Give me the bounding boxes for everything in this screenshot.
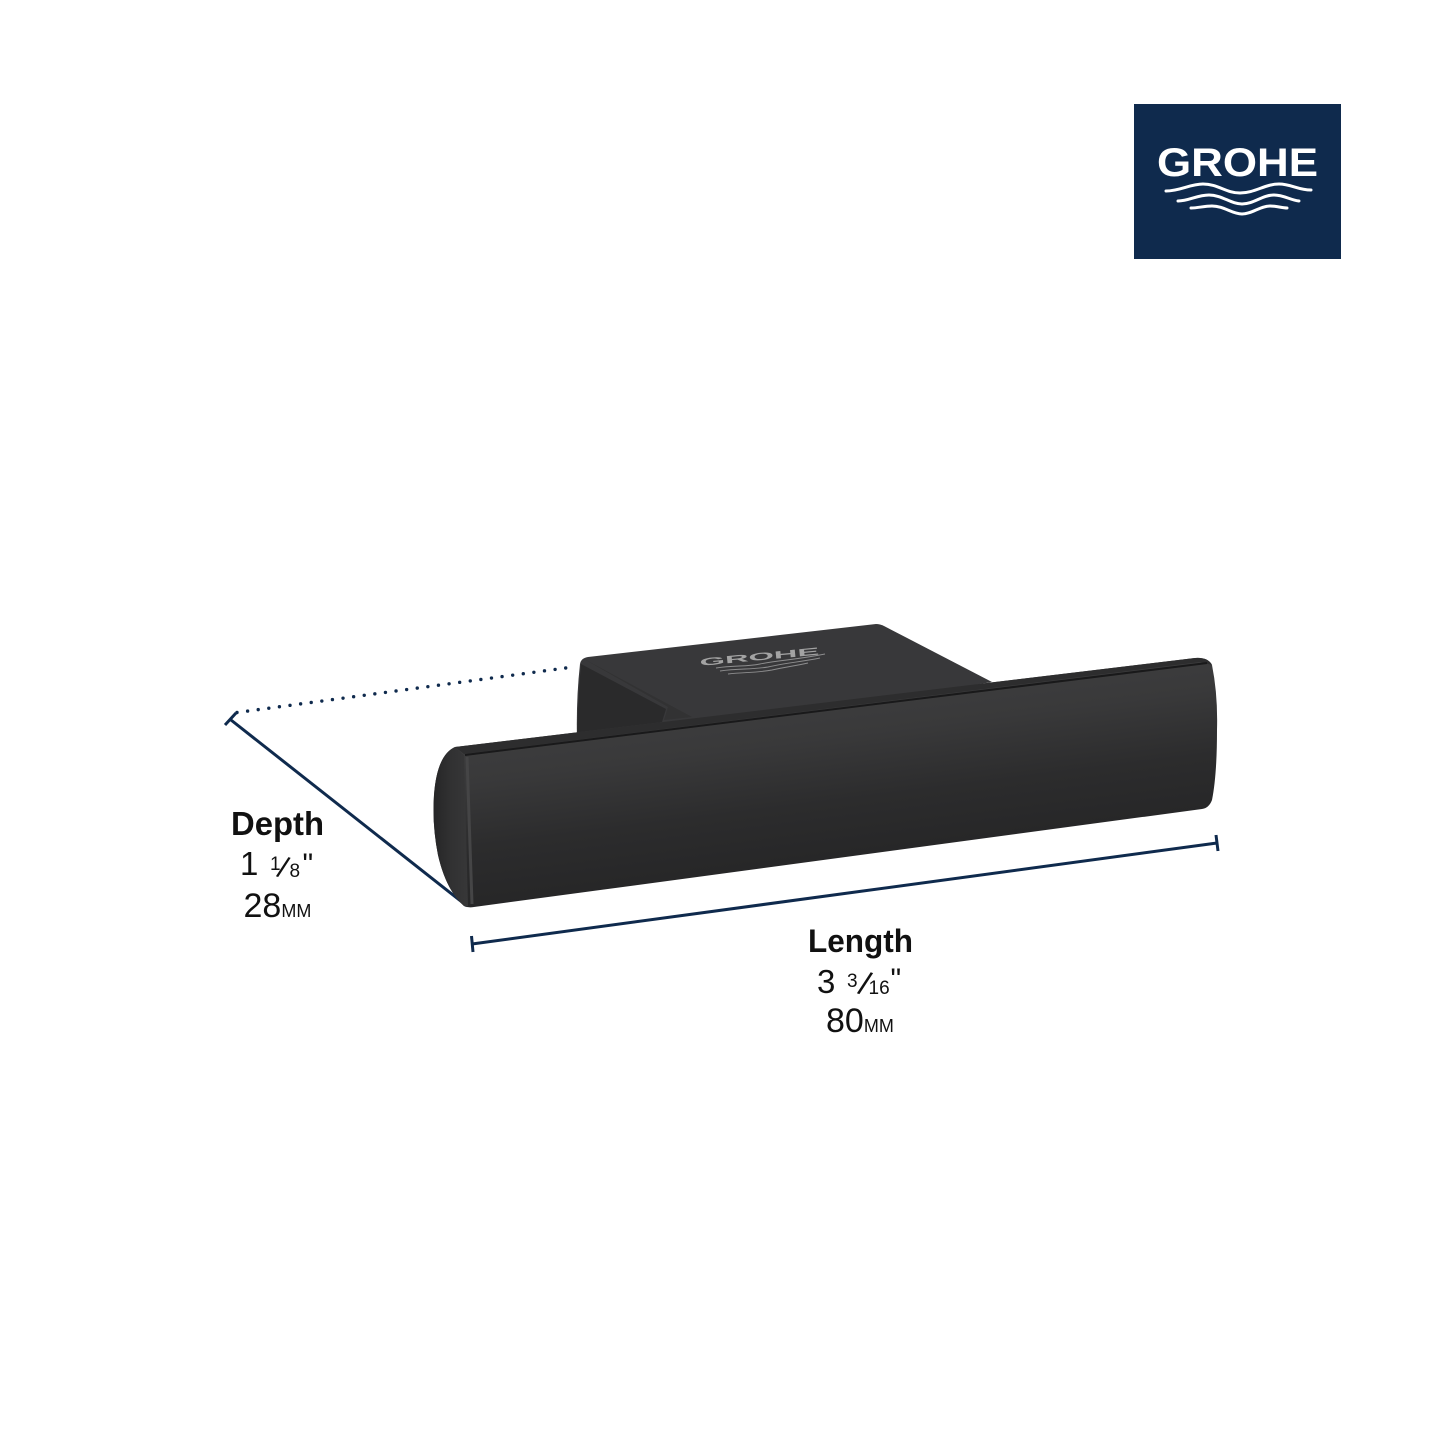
depth inches — [240, 845, 313, 885]
back plate — [577, 624, 992, 740]
depth dimension line — [225, 667, 573, 906]
bar top bevel — [455, 658, 1212, 754]
length inches: 16 — [868, 978, 890, 999]
plate crease — [584, 659, 692, 720]
length inches: 3 — [847, 971, 858, 992]
length label: Length — [808, 923, 913, 959]
engraved logo on plate: GROHE — [699, 646, 820, 669]
logo wordmark: GROHE — [1157, 141, 1318, 185]
depth label: Depth — [231, 805, 324, 842]
depth inches: " — [302, 848, 313, 881]
length dimension line — [472, 835, 1218, 952]
length inches — [817, 963, 901, 1003]
logo waves — [1166, 184, 1311, 214]
cap highlight — [467, 757, 472, 904]
length millimetres: 80MM — [826, 1002, 894, 1040]
depth inches: 1 — [240, 845, 258, 882]
bar body — [434, 658, 1217, 907]
depth inches: 8 — [290, 861, 300, 882]
depth millimetres: 28MM — [244, 887, 311, 925]
plate side shadow face — [577, 664, 666, 736]
length inches: " — [890, 963, 901, 996]
depth inches: 1 — [270, 854, 281, 875]
length inches: / — [855, 964, 876, 1003]
engraved logo on plate — [699, 646, 825, 674]
depth label — [231, 805, 324, 925]
logo: GROHE — [1134, 104, 1341, 259]
product: wall hook — [434, 624, 1217, 907]
length inches: 3 — [817, 963, 835, 1000]
length label — [808, 923, 913, 1040]
bar end cap — [434, 747, 468, 906]
depth inches: / — [274, 851, 293, 885]
